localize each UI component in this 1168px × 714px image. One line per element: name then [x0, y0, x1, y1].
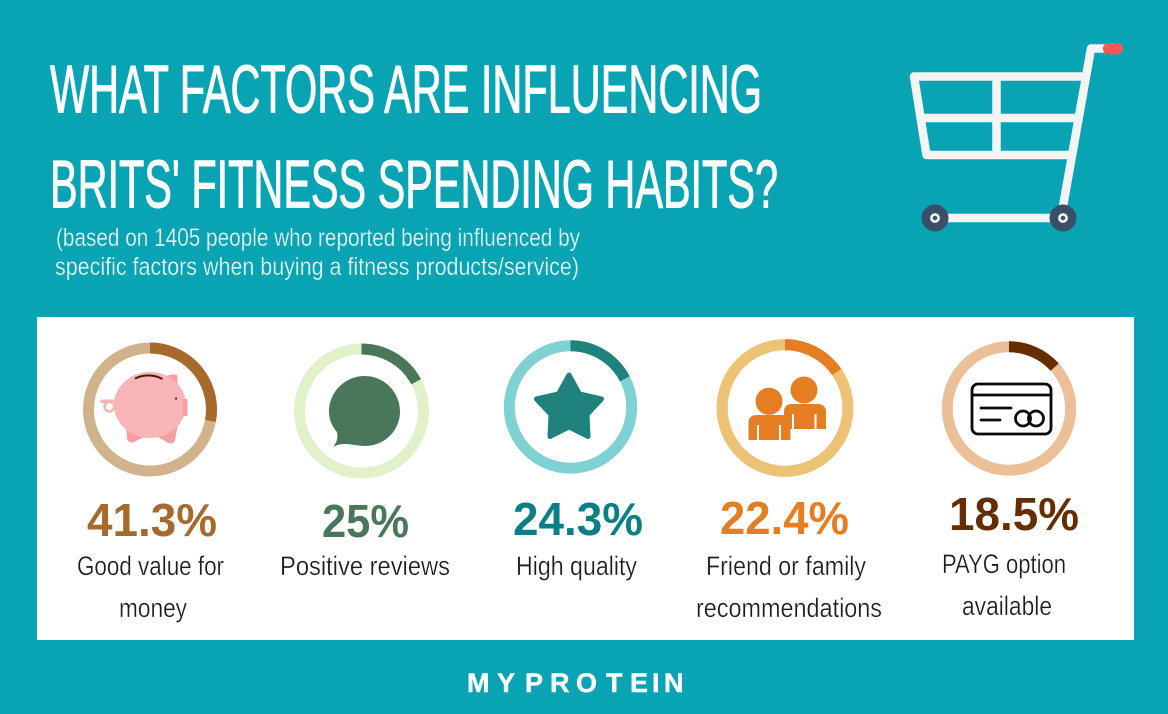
- icon: piggy bank: [100, 372, 188, 444]
- label: available: [962, 591, 1052, 621]
- label: High quality: [516, 551, 637, 581]
- factor: positive reviews: [280, 349, 450, 581]
- icon: speech bubble: [329, 376, 400, 447]
- label: recommendations: [696, 593, 882, 623]
- label: PAYG option: [942, 549, 1066, 579]
- factor: PAYG option available: [942, 347, 1079, 621]
- panel: factors: [37, 317, 1134, 640]
- value: 18.5%: [949, 488, 1079, 540]
- subtitle: (based on 1405 people who reported being influenced by: [56, 224, 580, 252]
- value: 22.4%: [720, 492, 849, 544]
- factor: high quality: [509, 346, 643, 581]
- label: [942, 549, 1066, 621]
- label: [696, 551, 882, 623]
- icon: star: [536, 375, 602, 436]
- value: 41.3%: [87, 494, 217, 546]
- factor: good value for money: [77, 348, 224, 623]
- label: Friend or family: [706, 551, 866, 581]
- logo: Myprotein: MYPROTEIN: [467, 668, 684, 698]
- donut: 18.5%: [947, 347, 1071, 470]
- value: 25%: [322, 495, 409, 547]
- label: Good value for: [77, 551, 224, 581]
- icon: credit card: [972, 384, 1051, 434]
- donut: 22.4%: [722, 345, 848, 471]
- donut: 41.3%: [88, 348, 212, 471]
- value: 24.3%: [513, 493, 643, 545]
- donut: 25%: [300, 349, 424, 473]
- label: Positive reviews: [280, 551, 450, 581]
- title: [50, 52, 778, 222]
- subtitle: specific factors when buying a fitness products/service): [55, 253, 579, 281]
- label: [77, 551, 224, 623]
- icon: shopping cart: [914, 43, 1123, 232]
- factor: friend or family recommendations: [696, 345, 882, 623]
- icon: two people: [748, 376, 826, 440]
- donut: 24.3%: [509, 346, 632, 468]
- label: money: [119, 593, 187, 623]
- subtitle: [55, 224, 580, 281]
